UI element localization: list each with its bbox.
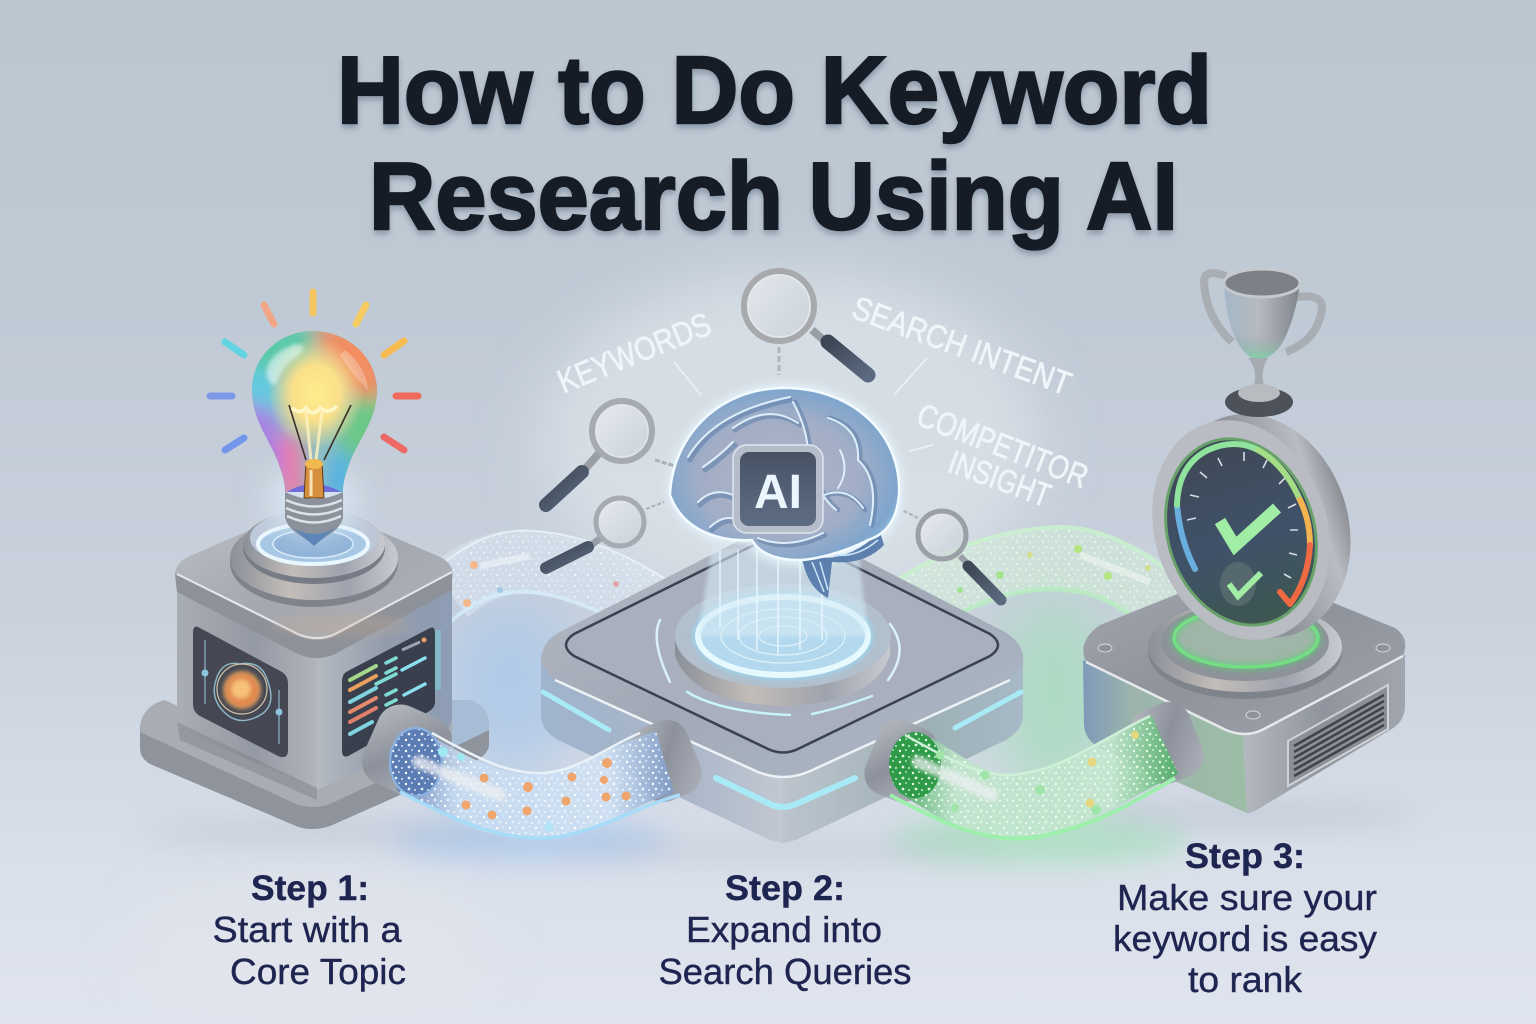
- ground glow: blue and green light under the tubes: [140, 600, 1420, 864]
- base plate: [140, 700, 489, 829]
- brain glow: [668, 385, 902, 565]
- step 2 caption: Step 2:: [725, 869, 845, 908]
- step 3 caption: Make sure your: [1117, 877, 1377, 918]
- label: keywords: KEYWORDS: [552, 305, 716, 400]
- brain folds: [688, 397, 875, 545]
- gauge ticks: [1187, 452, 1298, 578]
- colourful glass: [252, 331, 377, 492]
- step 3 caption: keyword is easy: [1113, 918, 1377, 959]
- cerebellum and stem: [800, 532, 884, 598]
- step 2 caption: Search Queries: [658, 951, 912, 992]
- step 3 caption: Step 3:: [1185, 837, 1305, 876]
- step 1 caption: Start with a: [212, 909, 403, 950]
- AI chip: AI: [754, 466, 802, 519]
- block sides: [1083, 655, 1405, 813]
- foot: [1225, 387, 1293, 417]
- big check: [1220, 508, 1277, 546]
- rays: [210, 292, 418, 450]
- cerebrum: [670, 388, 899, 560]
- connector: step 2 inlet: [622, 713, 708, 809]
- gauge arc: [1177, 444, 1310, 604]
- cube top slab: [175, 507, 453, 658]
- icon: speedometer gauge with check marks: [1125, 390, 1379, 663]
- bulb halo: [265, 464, 361, 536]
- title: [337, 37, 1212, 250]
- platform body: [541, 655, 1023, 843]
- central pedestal: [675, 584, 891, 706]
- connector: step 1 outlet: [354, 697, 460, 805]
- small check badge: [1220, 562, 1261, 606]
- step 1 machine: metal block with screens: [140, 507, 489, 829]
- left screen: [193, 627, 288, 757]
- step 2 caption: [658, 869, 912, 992]
- icon: glowing rainbow light bulb: [210, 292, 418, 546]
- label: insight: INSIGHT: [944, 443, 1056, 514]
- screw base: [285, 492, 343, 546]
- tube: front link from step 1 to step 2: [390, 728, 680, 838]
- icon: silver trophy: [1204, 269, 1322, 417]
- AI chip: [733, 445, 823, 533]
- tube: back link from step 1 to step 2: [445, 530, 690, 652]
- title: Research Using AI: [369, 143, 1178, 250]
- step 3 caption: [1113, 837, 1377, 1000]
- magnifier: lower right: [902, 510, 1001, 600]
- title: How to Do Keyword: [337, 37, 1212, 144]
- step 1 caption: Step 1:: [251, 869, 369, 908]
- magnifier: lower left: [546, 498, 664, 568]
- cup: [1224, 283, 1300, 360]
- light strips: [543, 620, 1021, 807]
- magnifier: upper left: [546, 401, 675, 505]
- connector: step 3 inlet: [1124, 695, 1210, 791]
- vent grille: [1288, 685, 1388, 786]
- tube: front link from step 2 to step 3: [889, 716, 1175, 839]
- step 3 machine: metal block with vent: [1083, 572, 1405, 813]
- tube: back link from step 2 to step 3: [890, 527, 1185, 642]
- stem: [1248, 358, 1270, 390]
- platform top: [541, 524, 1023, 777]
- label: search intent: SEARCH INTENT: [847, 289, 1076, 402]
- step 1 caption: Core Topic: [230, 951, 406, 992]
- gauge pedestal: [1148, 602, 1342, 699]
- block top: [1083, 572, 1405, 734]
- hologram beam from pedestal to brain: [698, 548, 868, 654]
- filament: [289, 405, 351, 498]
- right screen: [342, 628, 435, 757]
- label: competitor: COMPETITOR: [912, 396, 1093, 495]
- brain with AI chip: [668, 385, 902, 598]
- step 1 caption: [212, 869, 406, 992]
- step 2 caption: Expand into: [686, 909, 882, 950]
- floating brain labels: [552, 289, 1093, 514]
- connector: step 2 outlet: [858, 713, 944, 809]
- magnifier: top: [744, 271, 868, 375]
- cube body: [177, 590, 452, 800]
- lamp pedestal: [230, 510, 398, 607]
- handles: [1204, 273, 1322, 352]
- step 3 caption: to rank: [1188, 959, 1303, 1000]
- step 2 machine: metal platform: [541, 524, 1023, 843]
